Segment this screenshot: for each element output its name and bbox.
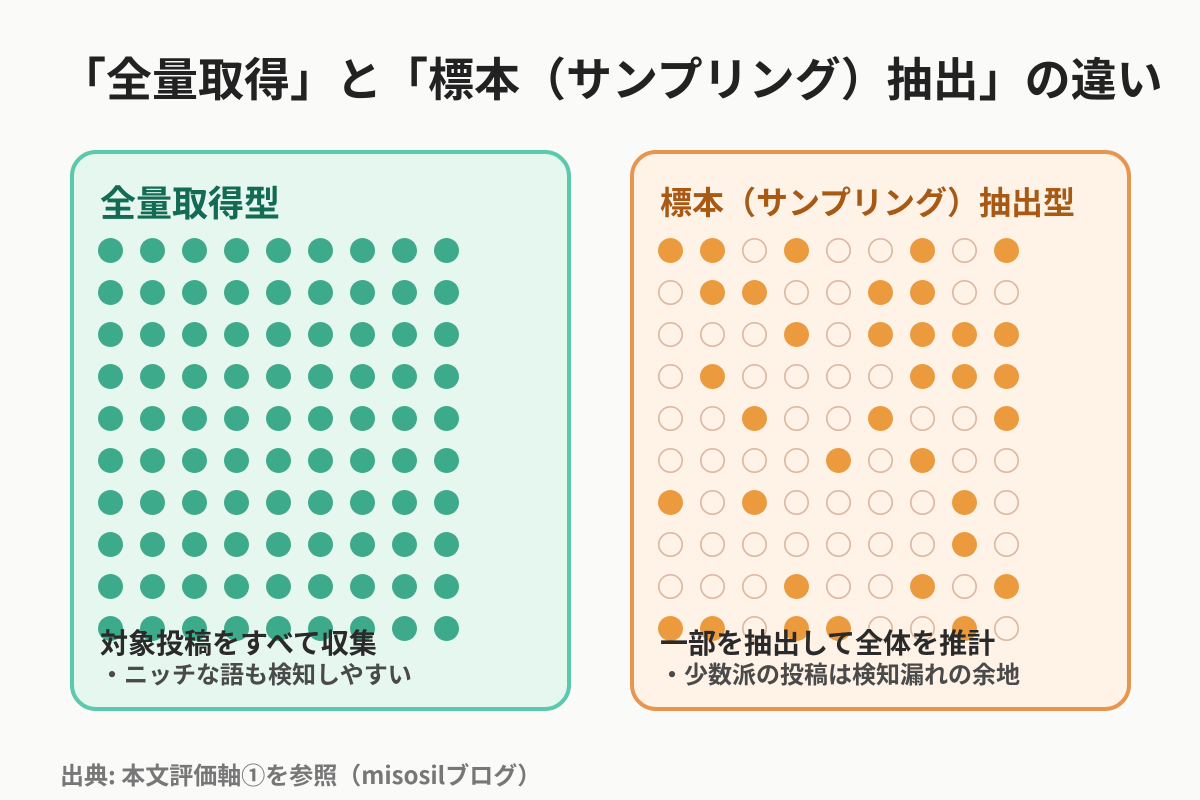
source note: 出典: 本文評価軸①を参照（misosilブログ） — [60, 756, 541, 791]
note: niche terms detectable: ・ニッチな語も検知しやすい — [100, 655, 412, 690]
heading: sampling extraction type: 標本（サンプリング）抽出型 — [660, 178, 1075, 224]
unsampled dots — [659, 239, 1018, 640]
caption: collect all posts: 対象投稿をすべて収集 — [100, 622, 377, 662]
sampled dots — [658, 238, 1019, 641]
dot grid: sampled posts — [658, 238, 1019, 641]
panel background: full acquisition — [72, 152, 569, 709]
caption: extract part and estimate whole: 一部を抽出して全体を推計 — [660, 622, 995, 662]
panel: full acquisition — [72, 152, 569, 709]
note: minority posts may be missed: ・少数派の投稿は検知漏れの余地 — [660, 655, 1020, 690]
title: 「全量取得」と「標本（サンプリング）抽出」の違い — [60, 44, 1163, 110]
dot grid: all posts collected — [98, 238, 459, 641]
heading: full acquisition type: 全量取得型 — [100, 175, 280, 227]
panel: sampling extraction — [632, 152, 1129, 709]
panel background: sampling extraction — [632, 152, 1129, 709]
